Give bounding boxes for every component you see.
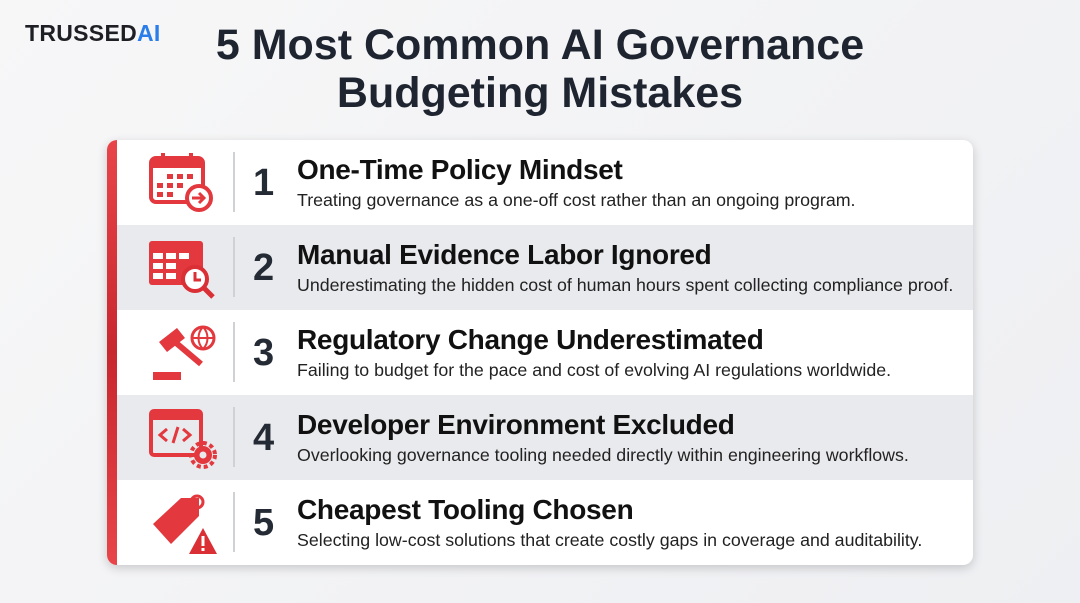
heading 4: Developer Environment Excluded [297, 409, 735, 440]
icon: code window gear [149, 409, 217, 469]
heading 5: Cheapest Tooling Chosen [297, 494, 633, 525]
text 5: Selecting low-cost solutions that create costly gaps in coverage and auditability. [297, 530, 922, 550]
heading 1: One-Time Policy Mindset [297, 154, 623, 185]
text 3: Failing to budget for the pace and cost of evolving AI regulations worldwide. [297, 360, 891, 380]
icon: gavel globe [153, 326, 216, 380]
icon: price tag warning [153, 494, 217, 554]
text 4: Overlooking governance tooling needed directly within engineering workflows. [297, 445, 909, 465]
row 5 [153, 492, 922, 554]
row 3: 3 [253, 332, 274, 374]
icon: spreadsheet clock [149, 241, 215, 299]
text 1: Treating governance as a one-off cost rather than an ongoing program. [297, 190, 856, 210]
title [216, 21, 864, 117]
row 4: 4 [253, 417, 274, 459]
row 1: 1 [253, 162, 274, 204]
icon: calendar arrow [149, 153, 213, 212]
heading 2: Manual Evidence Labor Ignored [297, 239, 712, 270]
row 2 [117, 225, 973, 310]
row 1 [149, 152, 856, 212]
logo: TRUSSEDAI [25, 20, 161, 46]
row 2: 2 [253, 247, 274, 289]
title: Budgeting Mistakes [337, 69, 743, 117]
text 2: Underestimating the hidden cost of human hours spent collecting compliance proof. [297, 275, 953, 295]
row 5: 5 [253, 502, 274, 544]
title: 5 Most Common AI Governance [216, 21, 864, 69]
row 3 [153, 322, 891, 382]
row 4 [117, 395, 973, 480]
panel: mistakes list [107, 140, 973, 565]
heading 3: Regulatory Change Underestimated [297, 324, 764, 355]
